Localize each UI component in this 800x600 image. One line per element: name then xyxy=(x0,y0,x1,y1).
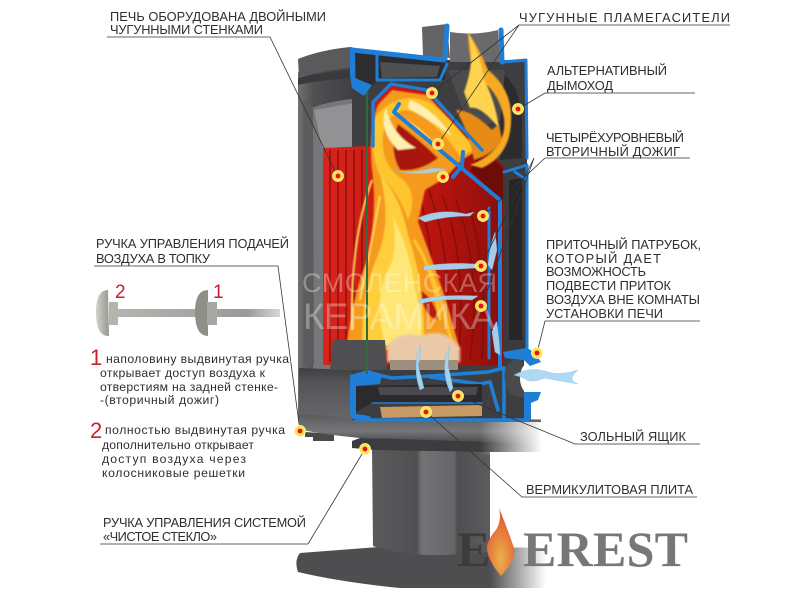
blue section: tray floor xyxy=(357,368,527,420)
step two description: полностью выдвинутая ручка xyxy=(105,423,285,437)
label: secondary burn: ВТОРИЧНЫЙ ДОЖИГ xyxy=(546,144,680,159)
watermark: СМОЛЕНСКАЯ xyxy=(302,268,497,298)
logo letter E: E xyxy=(457,521,490,577)
outer stove body left xyxy=(298,47,352,418)
vermiculite plate xyxy=(380,405,482,418)
air inlet port xyxy=(503,348,541,420)
flame: upper swirl ribbon xyxy=(373,98,474,220)
grey door bottom block xyxy=(330,340,387,370)
flame: orange base body xyxy=(346,90,478,350)
handle shaft xyxy=(116,309,280,317)
label: double cast iron walls: ЧУГУННЫМИ СТЕНКАМИ xyxy=(110,22,263,37)
red numeral one: 1 xyxy=(90,345,102,370)
air swirl arrows xyxy=(394,168,578,392)
label: air supply handle xyxy=(96,236,289,266)
ember bed xyxy=(387,333,460,362)
flue interior xyxy=(450,30,500,62)
step one description: наполовину выдвинутая ручка xyxy=(106,352,289,366)
inlet opening xyxy=(520,362,540,394)
step two description: дополнительно открывает xyxy=(102,438,254,452)
label: cast iron flame baffles: ЧУГУННЫЕ ПЛАМЕГАСИТЕЛИ xyxy=(519,10,730,25)
lower stove body front xyxy=(299,368,352,418)
ash pan interior xyxy=(356,384,482,412)
label: inlet pipe: КОТОРЫЙ ДАЕТ xyxy=(546,251,661,266)
step one description: отверстиям на задней стенке- xyxy=(100,380,278,394)
step one description xyxy=(90,345,289,407)
step two description: колосниковые решетки xyxy=(102,466,245,480)
flame: yellow core column xyxy=(362,175,424,345)
leader lines xyxy=(94,25,730,544)
step one description: -(вторичный дожиг) xyxy=(100,393,219,407)
label: clean glass handle: РУЧКА УПРАВЛЕНИЯ СИСТЕМОЙ xyxy=(103,515,306,530)
label: inlet pipe: ПОДВЕСТИ ПРИТОК xyxy=(546,278,672,293)
blue section: tray left xyxy=(350,370,382,421)
blue section: left wedge xyxy=(350,47,372,96)
label: clean glass handle xyxy=(103,515,306,544)
logo letters EREST: EREST xyxy=(523,521,688,577)
white fade of foot at right xyxy=(490,540,546,592)
step two description xyxy=(90,418,285,480)
step one description: открывает доступ воздуха к xyxy=(100,366,266,380)
label: secondary burn: ЧЕТЫРЁХУРОВНЕВЫЙ xyxy=(546,130,684,145)
firebox red wall xyxy=(323,84,503,365)
inlet cylinder xyxy=(505,358,524,397)
label: alternative flue: ДЫМОХОД xyxy=(547,78,613,93)
label: inlet pipe xyxy=(546,237,701,321)
label: inlet pipe: ВОЗДУХА ВНЕ КОМНАТЫ xyxy=(546,292,700,307)
right lower chamber xyxy=(503,162,527,352)
door frame xyxy=(312,97,372,370)
blue section: channel xyxy=(377,53,527,158)
flame: chimney xyxy=(468,32,511,168)
upper right chamber shading xyxy=(500,72,522,160)
label: alternative flue: АЛЬТЕРНАТИВНЫЙ xyxy=(547,63,667,78)
secondary wall slice xyxy=(489,208,500,360)
label: double cast iron walls xyxy=(110,9,326,37)
label: double cast iron walls: ПЕЧЬ ОБОРУДОВАНА ДВОЙНЫМИ xyxy=(110,9,326,24)
label: ash box: ЗОЛЬНЫЙ ЯЩИК xyxy=(580,429,687,444)
pedestal column xyxy=(372,448,490,555)
label: air supply handle: РУЧКА УПРАВЛЕНИЯ ПОДАЧЕЙ xyxy=(96,236,289,251)
white fade of base at right xyxy=(480,422,542,455)
red numeral two: 2 xyxy=(90,418,102,443)
watermark: КЕРАМИКА xyxy=(303,296,495,337)
label: inlet pipe: УСТАНОВКИ ПЕЧИ xyxy=(546,306,663,321)
base plate xyxy=(298,414,560,445)
knob position 2 xyxy=(96,290,118,336)
number 2: 2 xyxy=(115,282,126,303)
blue section: upper baffle xyxy=(373,84,482,150)
top channel interior xyxy=(355,52,445,88)
label: clean glass handle: «ЧИСТОЕ СТЕКЛО» xyxy=(103,529,217,544)
label: inlet pipe: ВОЗМОЖНОСТЬ xyxy=(546,264,646,279)
knob position 1 xyxy=(195,290,217,336)
blue section: right walls xyxy=(489,165,527,358)
label: air supply handle: ВОЗДУХА В ТОПКУ xyxy=(96,251,211,266)
top cap highlight xyxy=(298,47,350,77)
pedestal foot xyxy=(296,546,560,588)
stove interior backing xyxy=(352,50,527,420)
dark space above baffle tip xyxy=(470,150,503,202)
label: alternative flue xyxy=(547,63,667,93)
under-plate bracket xyxy=(352,438,560,452)
flame: dark hole inside swirl xyxy=(393,124,438,170)
number 1: 1 xyxy=(213,282,224,303)
blue section: top rim and flue xyxy=(352,26,502,62)
label: inlet pipe: ПРИТОЧНЫЙ ПАТРУБОК, xyxy=(546,237,701,252)
callout markers xyxy=(294,88,542,454)
blue section: lower baffle xyxy=(394,104,500,368)
watermark xyxy=(302,268,497,337)
Everest logo xyxy=(457,508,688,577)
red ribs xyxy=(330,150,484,362)
step two description: доступ воздуха через xyxy=(102,452,246,466)
handle diagram xyxy=(96,282,280,336)
flue collar xyxy=(422,24,450,58)
glass door line xyxy=(366,92,368,374)
label: vermiculite plate: ВЕРМИКУЛИТОВАЯ ПЛИТА xyxy=(526,482,693,497)
stove illustration xyxy=(296,24,578,588)
logo flame xyxy=(487,508,514,576)
small handle tab xyxy=(305,432,334,441)
label: secondary burn xyxy=(546,130,684,159)
flames xyxy=(346,32,511,350)
